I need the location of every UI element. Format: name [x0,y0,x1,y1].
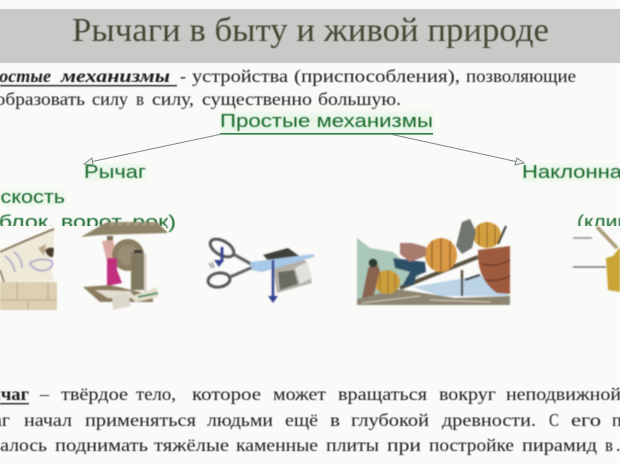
definition text: simple machines: существенно [202,89,312,109]
definition text: simple machines: силу [92,89,128,109]
lever definition paragraph: древности. [442,410,536,430]
lever definition paragraph: в [605,435,613,455]
definition text: simple machines: силу, [152,89,194,109]
heading: simple machines [220,111,433,135]
definition text: simple machines: - [180,66,186,86]
lever definition paragraph: постройке [429,435,514,455]
lever definition paragraph: поднимать [55,435,148,455]
lever definition paragraph: каменные [236,435,318,455]
illustration: barrels rolled up a ramp onto a ship [357,219,510,305]
lever definition paragraph: пирамид [522,435,597,455]
lever definition paragraph: тело, [136,384,176,404]
definition text: simple machines: в [136,89,144,109]
lever definition paragraph: С [549,410,559,430]
lever definition paragraph: начал [24,410,72,430]
illustration: well with windlass [81,222,168,310]
illustration: pulley block on wall [0,229,57,310]
label: block, windlass [0,212,176,236]
lever definition paragraph: тяжёлые [154,435,229,455]
lever definition paragraph: в [330,410,340,430]
label: inclined plane: Наклонная [522,162,620,182]
definition text: simple machines: (приспособления), [294,66,460,87]
lever definition paragraph: твёрдое [61,384,128,404]
title band [0,9,620,63]
heading: simple machines: Простые механизмы [220,111,433,131]
definition text: simple machines: устройства [192,66,288,86]
label: lever: Рычаг [84,162,147,182]
definition text: simple machines [0,66,576,109]
lever definition paragraph: вокруг [439,384,496,404]
definition text: simple machines: механизмы [60,66,170,86]
lever definition paragraph: может [273,384,326,404]
definition text: simple machines: большую. [318,89,401,109]
lever definition paragraph: ещё [285,410,318,430]
arrow to lever [84,134,222,165]
lever definition paragraph: его [571,410,601,430]
title: Рычаги в быту и живой природе [72,12,549,49]
definition text: simple machines: позволяющие [466,66,576,86]
lever definition paragraph [0,384,620,455]
lever definition paragraph: людьми [207,410,273,430]
lever definition paragraph: при [387,435,421,455]
arrow to inclined plane [390,134,524,165]
lever definition paragraph: применяться [85,410,196,430]
lever definition paragraph: плиты [326,435,379,455]
illustration: wedge [573,228,620,292]
lever definition paragraph: – [39,384,50,404]
lever definition paragraph: глубокой [351,410,429,430]
lever definition paragraph: вращаться [338,384,427,404]
lever definition paragraph: неподвижной [506,384,620,404]
lever definition paragraph: которое [192,384,261,404]
illustration: scissors cutting metal [207,235,314,303]
